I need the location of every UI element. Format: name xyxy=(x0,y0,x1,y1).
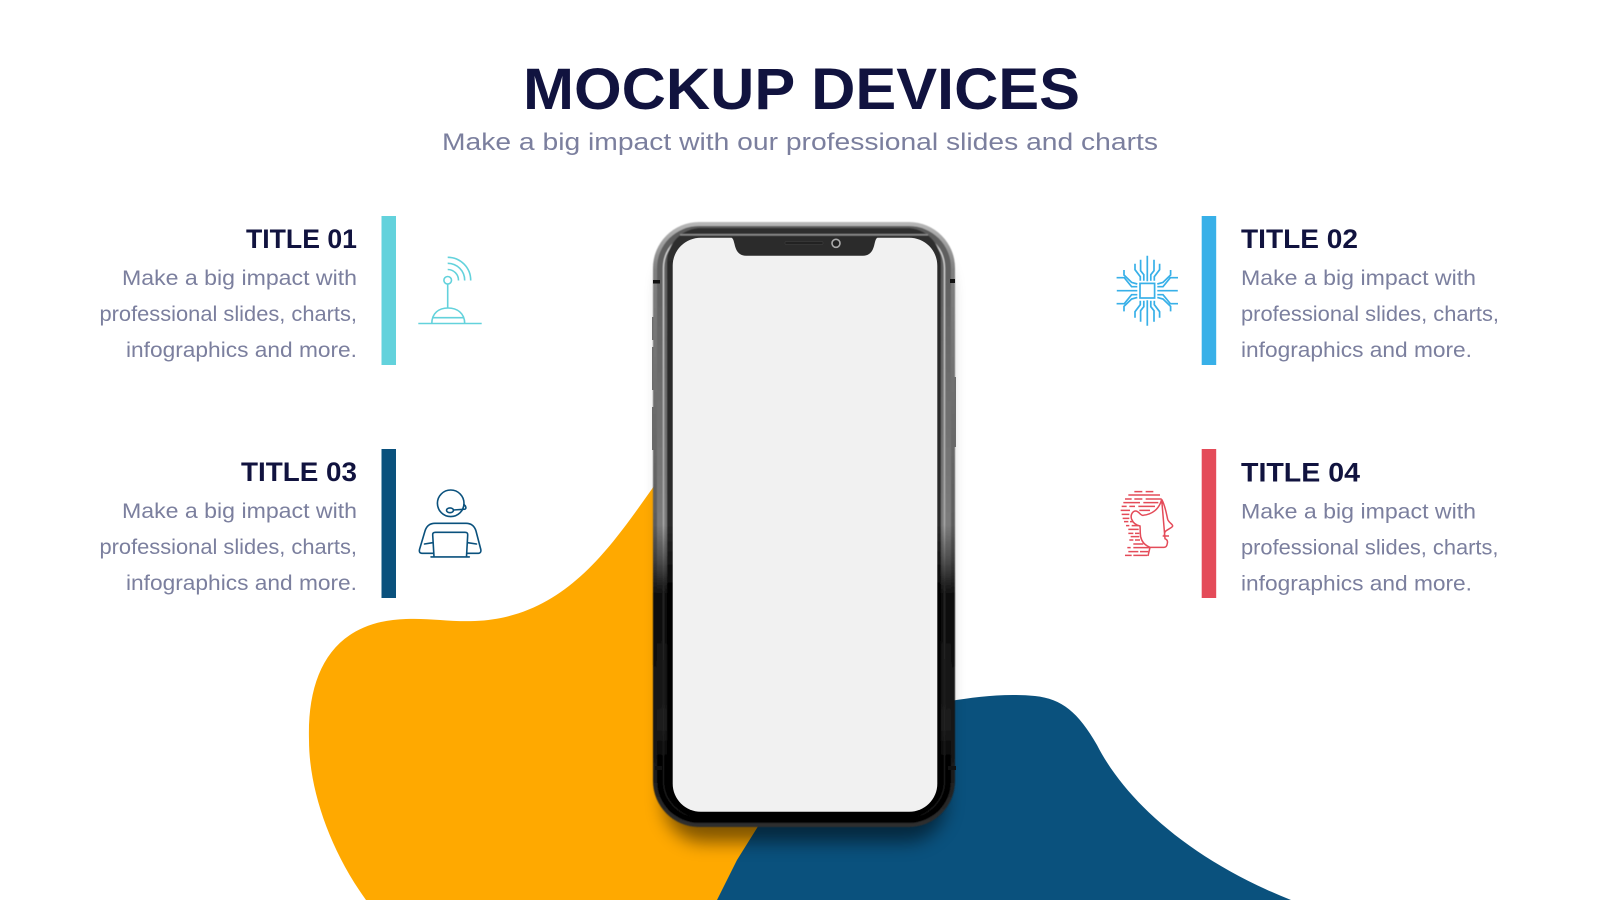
body 04 xyxy=(1241,500,1498,596)
body 01: Make a big impact with xyxy=(122,267,357,290)
body 01: professional slides, charts, xyxy=(100,303,357,326)
body 04: Make a big impact with xyxy=(1241,500,1476,524)
icon: head profile xyxy=(1121,492,1173,556)
icon: antenna xyxy=(418,257,482,324)
body 02: infographics and more. xyxy=(1241,339,1472,362)
title: MOCKUP DEVICES xyxy=(523,57,1080,122)
icon: headset operator xyxy=(419,490,481,557)
panel: title 03 xyxy=(100,449,481,598)
phone shadow xyxy=(664,250,946,842)
panel: title 02 xyxy=(1117,216,1499,365)
heading 03: TITLE 03 xyxy=(241,457,357,487)
orange blob xyxy=(309,472,780,900)
phone screen xyxy=(673,238,937,812)
body 01: infographics and more. xyxy=(126,339,357,362)
bar 02 xyxy=(1202,216,1216,365)
panel: title 01 xyxy=(100,216,482,365)
phone frame xyxy=(653,222,955,827)
subtitle: Make a big impact with our professional slides and charts xyxy=(442,129,1158,156)
body 01 xyxy=(100,267,357,362)
side buttons xyxy=(652,317,956,450)
body 03 xyxy=(100,500,357,595)
bar 03 xyxy=(382,449,396,598)
body 03: professional slides, charts, xyxy=(100,536,357,559)
heading 04: TITLE 04 xyxy=(1241,458,1360,488)
navy blob xyxy=(717,695,1291,900)
panel: title 04 xyxy=(1121,449,1498,598)
body 04: professional slides, charts, xyxy=(1241,536,1498,560)
body 02: Make a big impact with xyxy=(1241,267,1476,290)
body 02: professional slides, charts, xyxy=(1241,303,1499,326)
heading 02: TITLE 02 xyxy=(1241,224,1358,254)
phone mockup xyxy=(652,222,956,842)
bar 01 xyxy=(382,216,396,365)
heading 01: TITLE 01 xyxy=(246,224,357,254)
icon: chip xyxy=(1117,256,1178,326)
body 04: infographics and more. xyxy=(1241,572,1472,596)
body 03: infographics and more. xyxy=(126,572,357,595)
body 02 xyxy=(1241,267,1499,362)
body 03: Make a big impact with xyxy=(122,500,357,523)
bar 04 xyxy=(1202,449,1216,598)
antenna bands xyxy=(653,279,956,770)
notch xyxy=(730,237,878,256)
